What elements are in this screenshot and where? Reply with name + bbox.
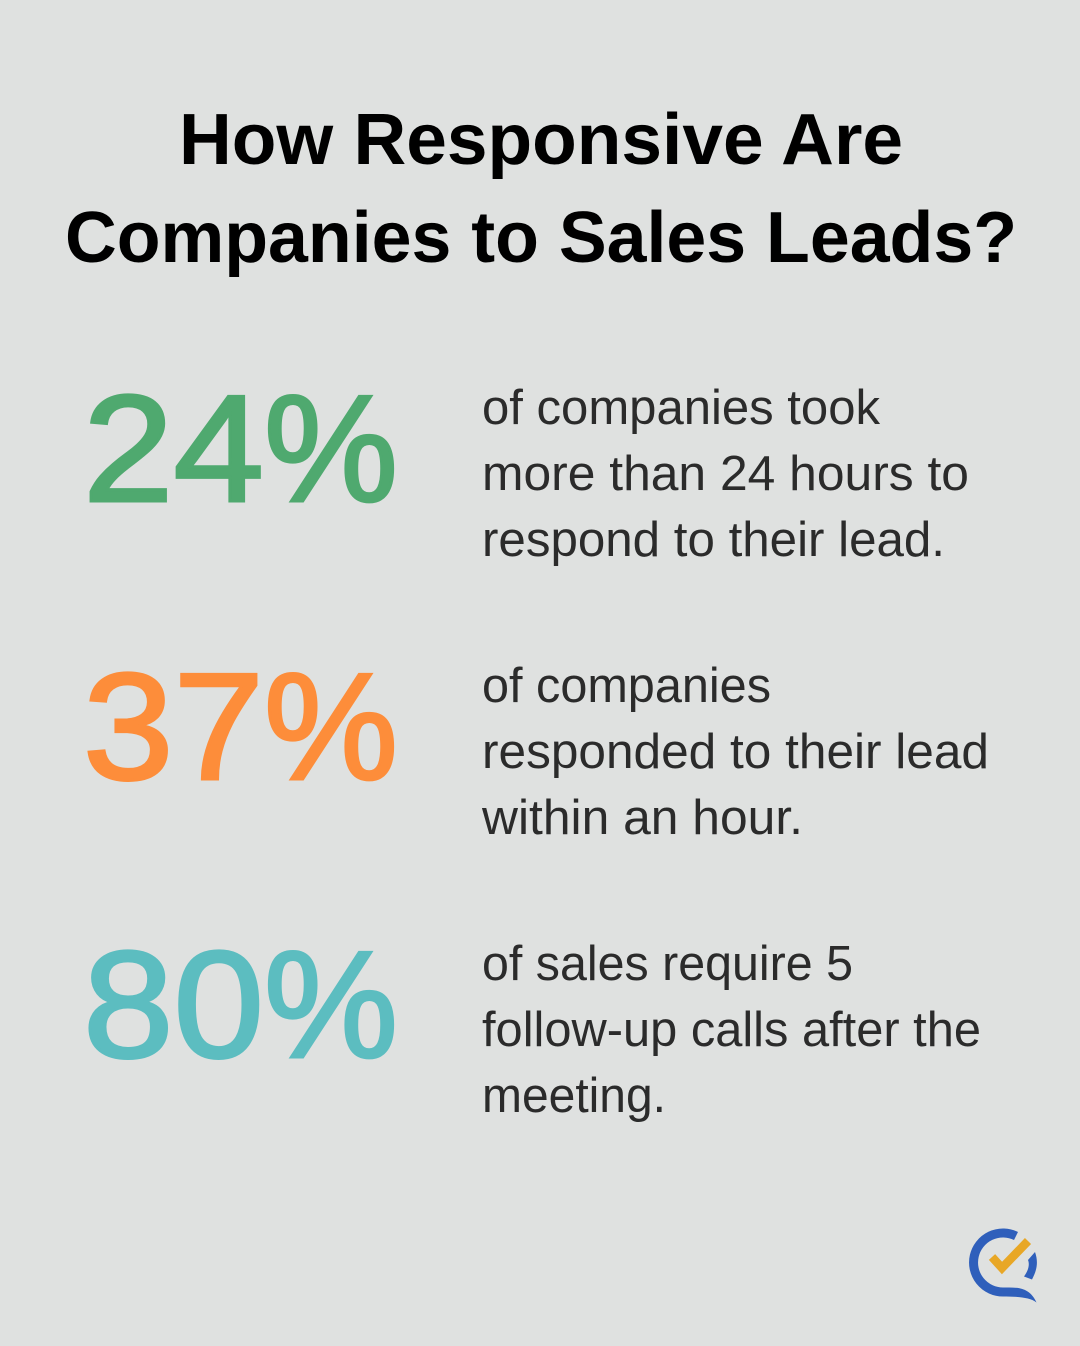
icon: logo speech bubble with check mark: [974, 1233, 1037, 1302]
text: 24% description: more than 24 hours to: [482, 447, 969, 501]
text: 24% description: respond to their lead.: [482, 513, 945, 567]
number: 24%: %: [264, 364, 398, 534]
stat: 24%: [83, 364, 969, 567]
title: [65, 100, 1017, 278]
number: 24%: 24: [83, 364, 264, 534]
text: 80% description: [482, 937, 981, 1123]
title: Companies to Sales Leads?: [65, 198, 1017, 278]
number: 80%: [83, 920, 398, 1090]
number: 37%: %: [264, 642, 398, 812]
text: 80% description: follow-up calls after the: [482, 1003, 981, 1057]
stat: 37%: [83, 642, 989, 845]
text: 37% description: [481, 659, 989, 845]
number: 80%: 80: [83, 920, 264, 1090]
number: 37%: [83, 642, 398, 812]
text: 24% description: [482, 381, 969, 567]
text: 37% description: responded to their lead: [482, 725, 989, 779]
text: 37% description: within an hour.: [481, 791, 803, 845]
title: How Responsive Are: [179, 100, 903, 180]
number: 37%: 37: [83, 642, 264, 812]
text: 80% description: of sales require 5: [482, 937, 853, 991]
number: 24%: [83, 364, 398, 534]
stat: 80%: [83, 920, 981, 1123]
text: 37% description: of companies: [482, 659, 771, 713]
number: 80%: %: [264, 920, 398, 1090]
text: 80% description: meeting.: [482, 1069, 666, 1123]
text: 24% description: of companies took: [482, 381, 880, 435]
